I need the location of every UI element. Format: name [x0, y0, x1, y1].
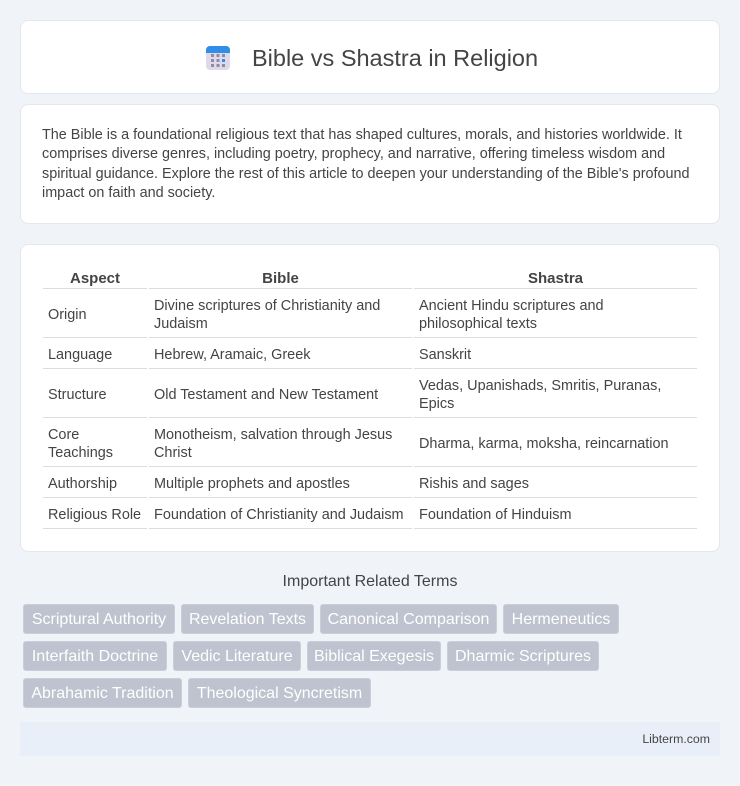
panel: introduction [20, 104, 720, 224]
comparison table: Language [48, 347, 112, 363]
related term tags: Revelation Texts [189, 611, 306, 628]
intro text: spiritual guidance. Explore the rest of this article to deepen your understanding of the Bible's profound [42, 166, 690, 182]
related term tags: Interfaith Doctrine [32, 648, 158, 665]
comparison table: Foundation of Hinduism [419, 507, 571, 523]
related term tags: Abrahamic Tradition [31, 685, 174, 702]
panel: comparison table [20, 244, 720, 552]
comparison table: Teachings [48, 445, 113, 461]
comparison table: Judaism [154, 316, 208, 332]
comparison table: Epics [419, 396, 454, 412]
footer credit: Libterm.com [642, 732, 710, 746]
related term tags [23, 604, 619, 708]
comparison table: Structure [48, 387, 107, 403]
comparison table: philosophical texts [419, 316, 537, 332]
comparison table: Origin [48, 307, 87, 323]
comparison table: Shastra [528, 270, 583, 287]
heading: related terms: Important Related Terms [283, 573, 457, 590]
comparison table: Foundation of Christianity and Judaism [154, 507, 404, 523]
related term tags: Theological Syncretism [197, 685, 362, 702]
comparison table: Vedas, Upanishads, Smritis, Puranas, [419, 378, 661, 394]
related term tags: Scriptural Authority [32, 611, 166, 628]
comparison table: Sanskrit [419, 347, 471, 363]
comparison table: Authorship [48, 476, 117, 492]
related term tags: Hermeneutics [512, 611, 610, 628]
related term tags: Biblical Exegesis [314, 648, 434, 665]
intro text: impact on faith and society. [42, 185, 215, 201]
comparison table: Christ [154, 445, 192, 461]
intro text: The Bible is a foundational religious text that has shaped cultures, morals, and histories worldwide. It [42, 127, 682, 143]
intro text: comprises diverse genres, including poetry, prophecy, and narrative, offering timeless wisdom and [42, 146, 665, 162]
comparison table: Religious Role [48, 507, 141, 523]
comparison table [43, 270, 697, 529]
comparison table: Hebrew, Aramaic, Greek [154, 347, 310, 363]
comparison table: Old Testament and New Testament [154, 387, 378, 403]
panel: title header [20, 20, 720, 94]
comparison table: Divine scriptures of Christianity and [154, 298, 380, 314]
comparison table: Monotheism, salvation through Jesus [154, 427, 392, 443]
footer [20, 722, 720, 756]
related term tags: Dharmic Scriptures [455, 648, 591, 665]
comparison table: Ancient Hindu scriptures and [419, 298, 604, 314]
intro text [42, 127, 690, 201]
related term tags: Vedic Literature [181, 648, 293, 665]
comparison table: Dharma, karma, moksha, reincarnation [419, 436, 669, 452]
icon: calendar [206, 46, 230, 70]
comparison table: Core [48, 427, 79, 443]
comparison table: Aspect [70, 270, 120, 287]
comparison table: Rishis and sages [419, 476, 529, 492]
comparison table: Multiple prophets and apostles [154, 476, 350, 492]
related term tags: Canonical Comparison [328, 611, 489, 628]
title: Bible vs Shastra in Religion [252, 45, 538, 71]
comparison table: Bible [262, 270, 299, 287]
